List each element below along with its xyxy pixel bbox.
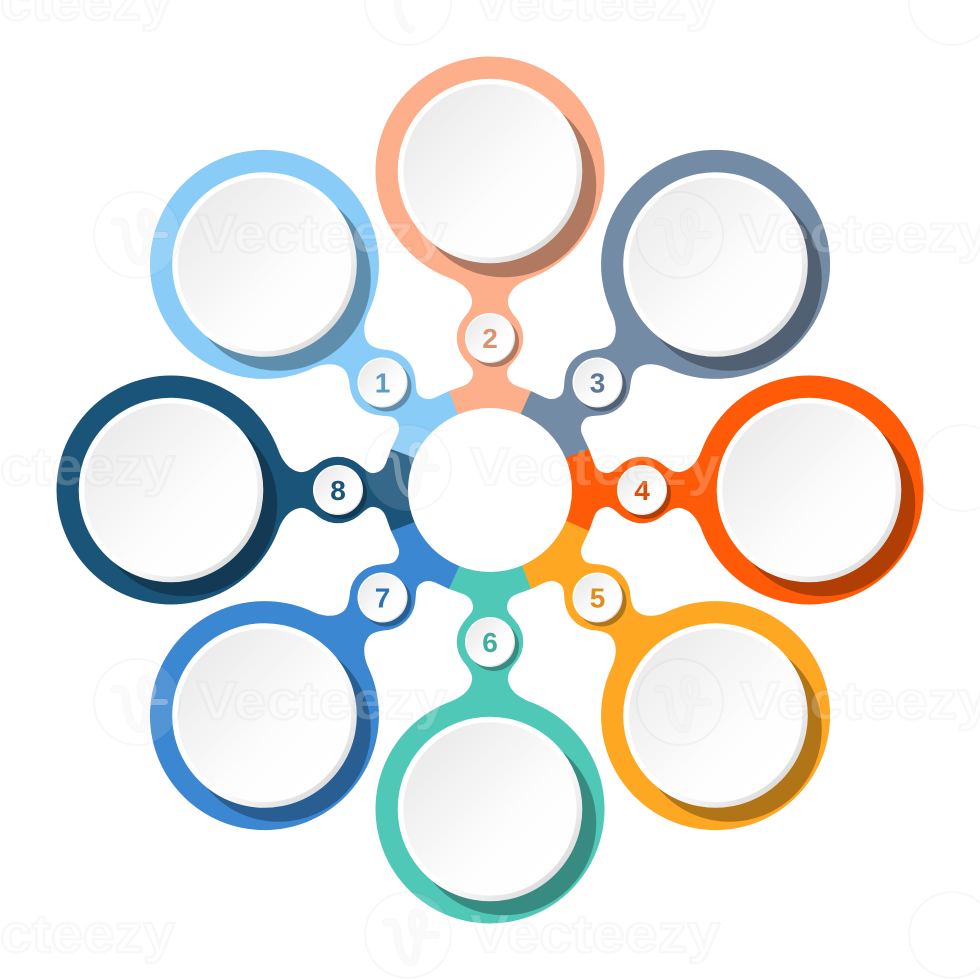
- arm 8 number badge: 8: [330, 475, 346, 506]
- watermark overlay: cteezy: [0, 904, 175, 964]
- arm 4 number badge: 4: [634, 475, 650, 506]
- watermark overlay: Vecteezy: [197, 671, 447, 731]
- arm 3 disc: [623, 172, 822, 371]
- arm 5: amber: [459, 459, 877, 877]
- arm 4 disc: [717, 398, 915, 596]
- watermark overlay: cteezy: [0, 437, 175, 497]
- arm 8 ring and connector: [56, 376, 420, 604]
- arm 5 ring and connector: [459, 459, 877, 877]
- watermark overlay: Vecteezy: [470, 904, 720, 964]
- arm 2 number badge: [465, 313, 519, 367]
- arm 8: navy: [56, 376, 420, 604]
- arm 4 number badge: [617, 465, 671, 519]
- arm 6 ring and connector: [376, 560, 604, 924]
- arm 6 number badge: 6: [482, 627, 498, 658]
- watermark overlay: Vecteezy: [197, 204, 447, 264]
- arm 1 number badge: [358, 358, 412, 412]
- arm 8 disc: [79, 398, 277, 596]
- watermark overlay: Vecteezy: [740, 204, 980, 264]
- arm 5 disc: [623, 623, 822, 822]
- arm 4: orange-red: [560, 376, 924, 604]
- arm 3: slate: [459, 103, 877, 521]
- arm 1 disc: [172, 172, 371, 371]
- arm 1: light blue: [103, 103, 521, 521]
- arm 5 number badge: [572, 572, 626, 626]
- arm 1 ring and connector: [103, 103, 521, 521]
- watermark overlay: Vecteezy: [470, 437, 720, 497]
- arm 3 ring and connector: [459, 103, 877, 521]
- arm 4 ring and connector: [560, 376, 924, 604]
- arm 2 disc: [398, 79, 596, 277]
- arm 7 number badge: [358, 572, 412, 626]
- arm 6 disc: [398, 717, 596, 915]
- arm 6: teal: [376, 560, 604, 924]
- arm 2: salmon: [376, 56, 604, 420]
- arm 2 number badge: 2: [482, 323, 498, 354]
- arm 7 ring and connector: [103, 459, 521, 877]
- arm 6 number badge: [465, 617, 519, 671]
- watermark overlay: Vecteezy: [740, 671, 980, 731]
- arm 7: blue: [103, 459, 521, 877]
- arm 1 number badge: 1: [375, 368, 390, 398]
- arm 3 number badge: [572, 358, 626, 412]
- arm 7 number badge: 7: [375, 582, 390, 614]
- arm 8 number badge: [313, 465, 367, 519]
- arm 5 number badge: 5: [590, 582, 605, 614]
- arm 2 ring and connector: [376, 56, 604, 420]
- arm 7 disc: [172, 623, 371, 822]
- center circle: [408, 408, 572, 572]
- arm 3 number badge: 3: [590, 368, 605, 398]
